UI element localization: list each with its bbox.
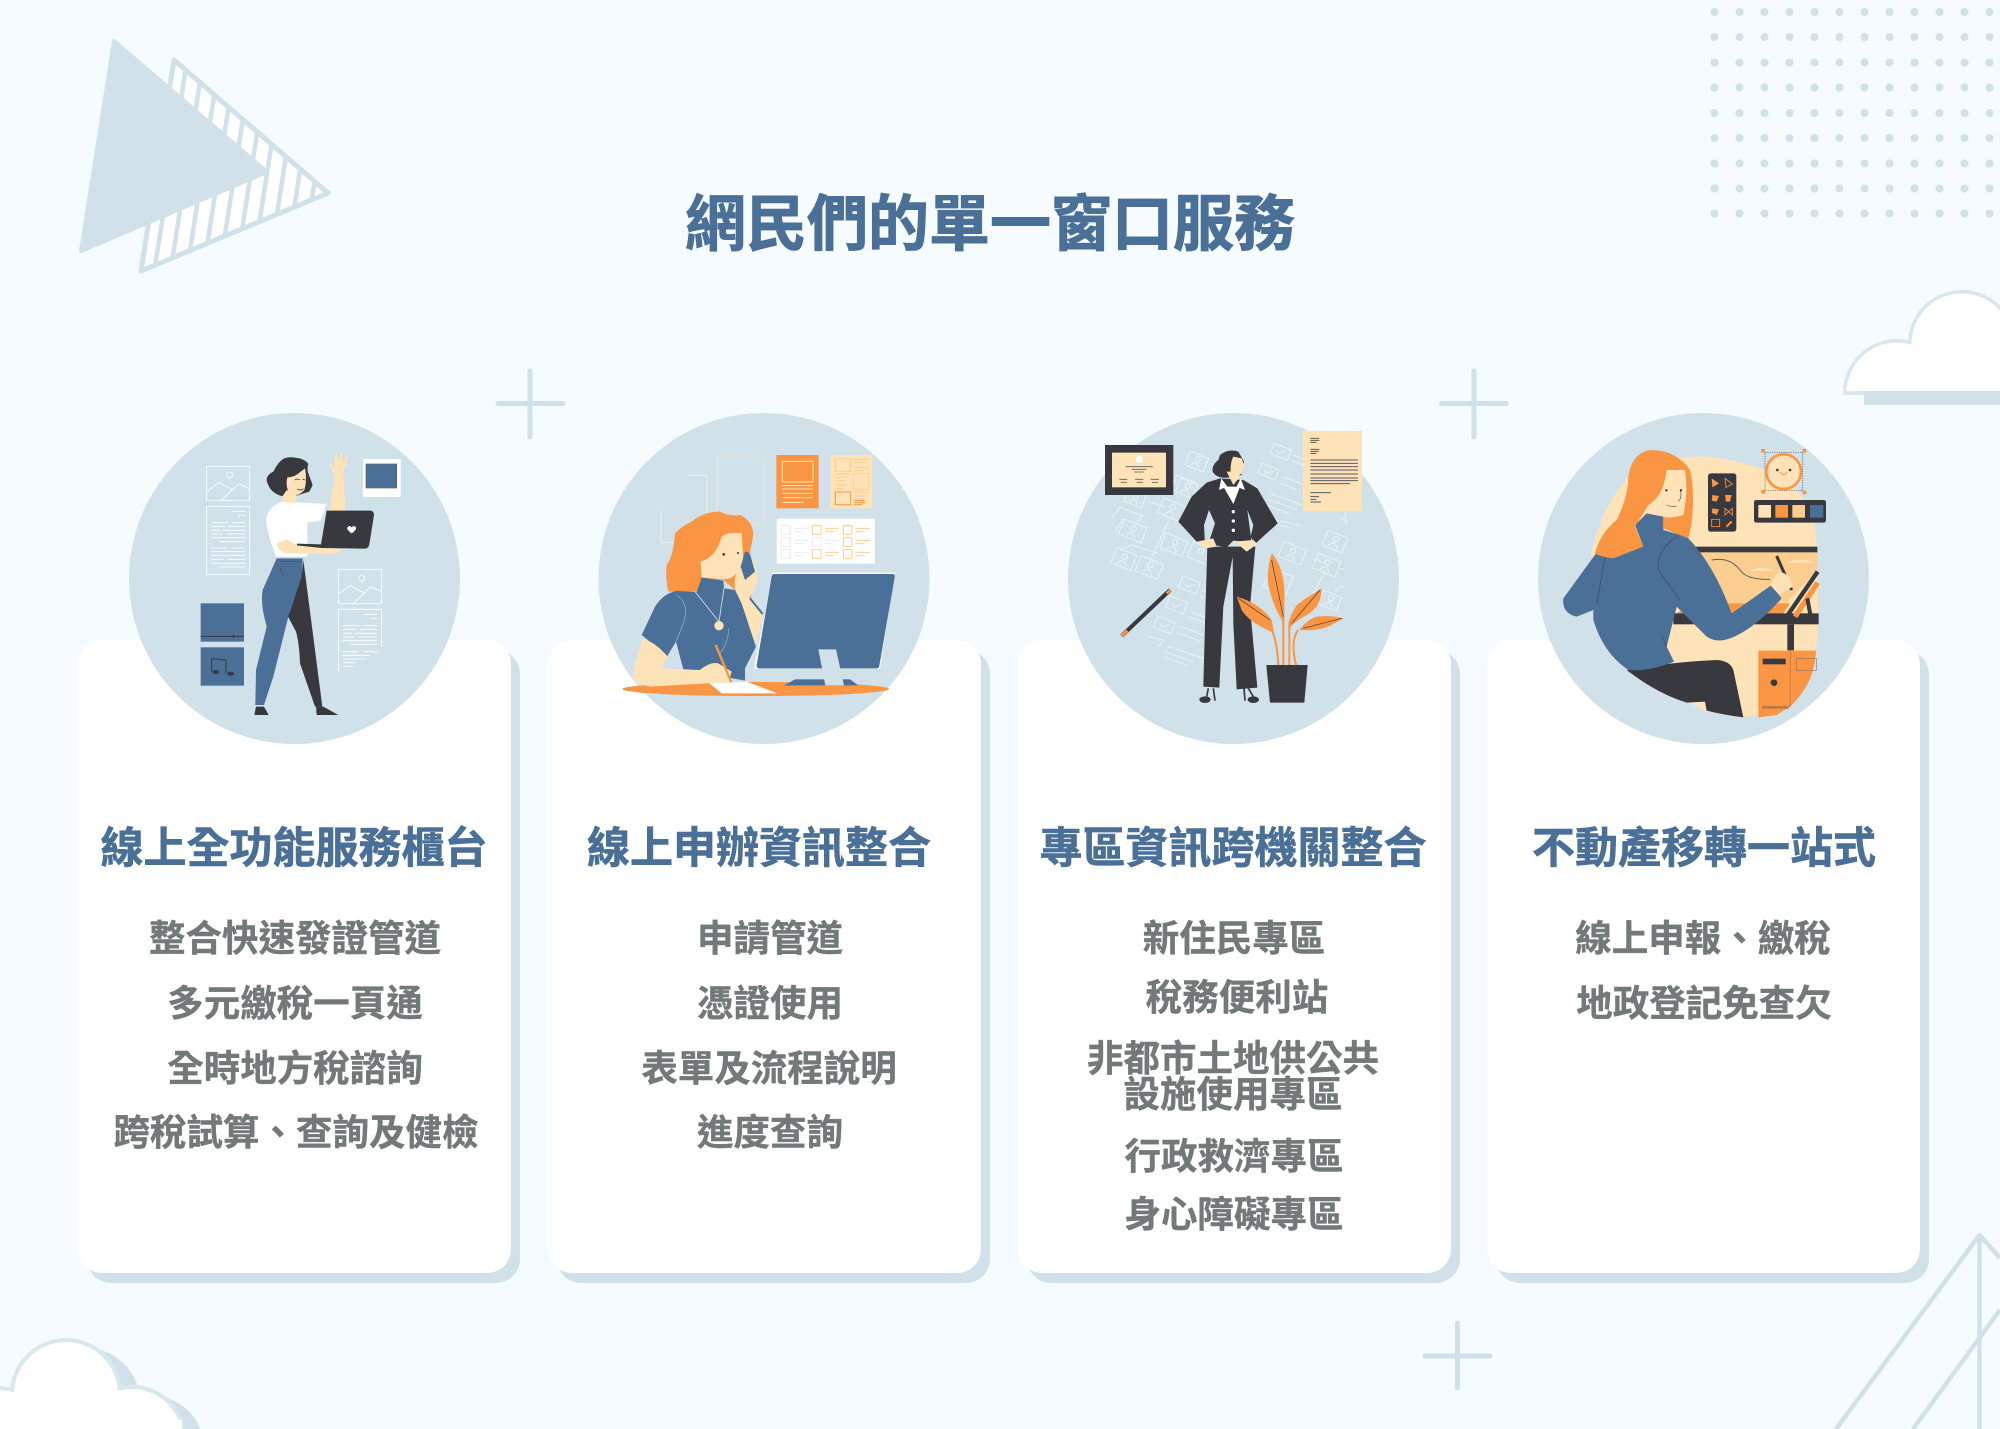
panel: card 4 real estate xyxy=(1487,413,1929,1283)
list: service items: 線上申報、繳稅 xyxy=(1575,918,1831,959)
list: service items xyxy=(1087,918,1379,1235)
list: service items: 表單及流程說明 xyxy=(641,1048,897,1089)
panel: card 3 cross-agency xyxy=(1018,413,1460,1283)
decoration: triangles top left xyxy=(79,39,330,274)
panel: card 1 online counter xyxy=(78,413,520,1283)
list: service items: 跨稅試算、查詢及健檢 xyxy=(114,1112,478,1153)
heading: 專區資訊跨機關整合 xyxy=(1040,825,1426,873)
title: 網民們的單一窗口服務 xyxy=(685,190,1295,258)
list: service items: 新住民專區 xyxy=(1143,918,1325,959)
list: service items xyxy=(641,918,897,1153)
list: service items: 整合快速發證管道 xyxy=(149,918,441,959)
list: service items: 行政救濟專區 xyxy=(1124,1136,1344,1177)
list: service items: 地政登記免查欠 xyxy=(1576,983,1832,1024)
decoration: dot grid top right xyxy=(1710,8,1994,218)
decoration: line triangle bottom right xyxy=(1836,1235,2000,1429)
list: service items: 申請管道 xyxy=(697,918,843,959)
list: service items: 稅務便利站 xyxy=(1146,977,1328,1018)
illustration: woman with laptop xyxy=(201,450,401,715)
decoration: plus signs xyxy=(498,371,1506,1388)
list: service items xyxy=(1575,918,1832,1024)
list: service items: 進度查詢 xyxy=(697,1112,843,1153)
heading: 不動產移轉一站式 xyxy=(1532,825,1876,873)
decoration: cloud top right xyxy=(1843,290,2000,405)
illustration: designer at drawing table xyxy=(1563,449,1826,717)
list: service items: 憑證使用 xyxy=(697,983,843,1024)
list: service items xyxy=(114,918,478,1153)
heading: 線上全功能服務櫃台 xyxy=(100,825,488,873)
illustration: woman on phone at desk xyxy=(622,455,895,696)
illustration: businesswoman with plant xyxy=(1105,431,1362,703)
heading: 線上申辦資訊整合 xyxy=(587,825,931,873)
list: service items: 設施使用專區 xyxy=(1124,1074,1342,1115)
panel: card 2 application info xyxy=(548,413,990,1283)
list: service items: 身心障礙專區 xyxy=(1124,1194,1344,1235)
list: service items: 多元繳稅一頁通 xyxy=(167,983,423,1024)
list: service items: 非都市土地供公共 xyxy=(1087,1038,1379,1079)
decoration: cloud bottom left xyxy=(0,1338,200,1429)
list: service items: 全時地方稅諮詢 xyxy=(167,1048,423,1089)
